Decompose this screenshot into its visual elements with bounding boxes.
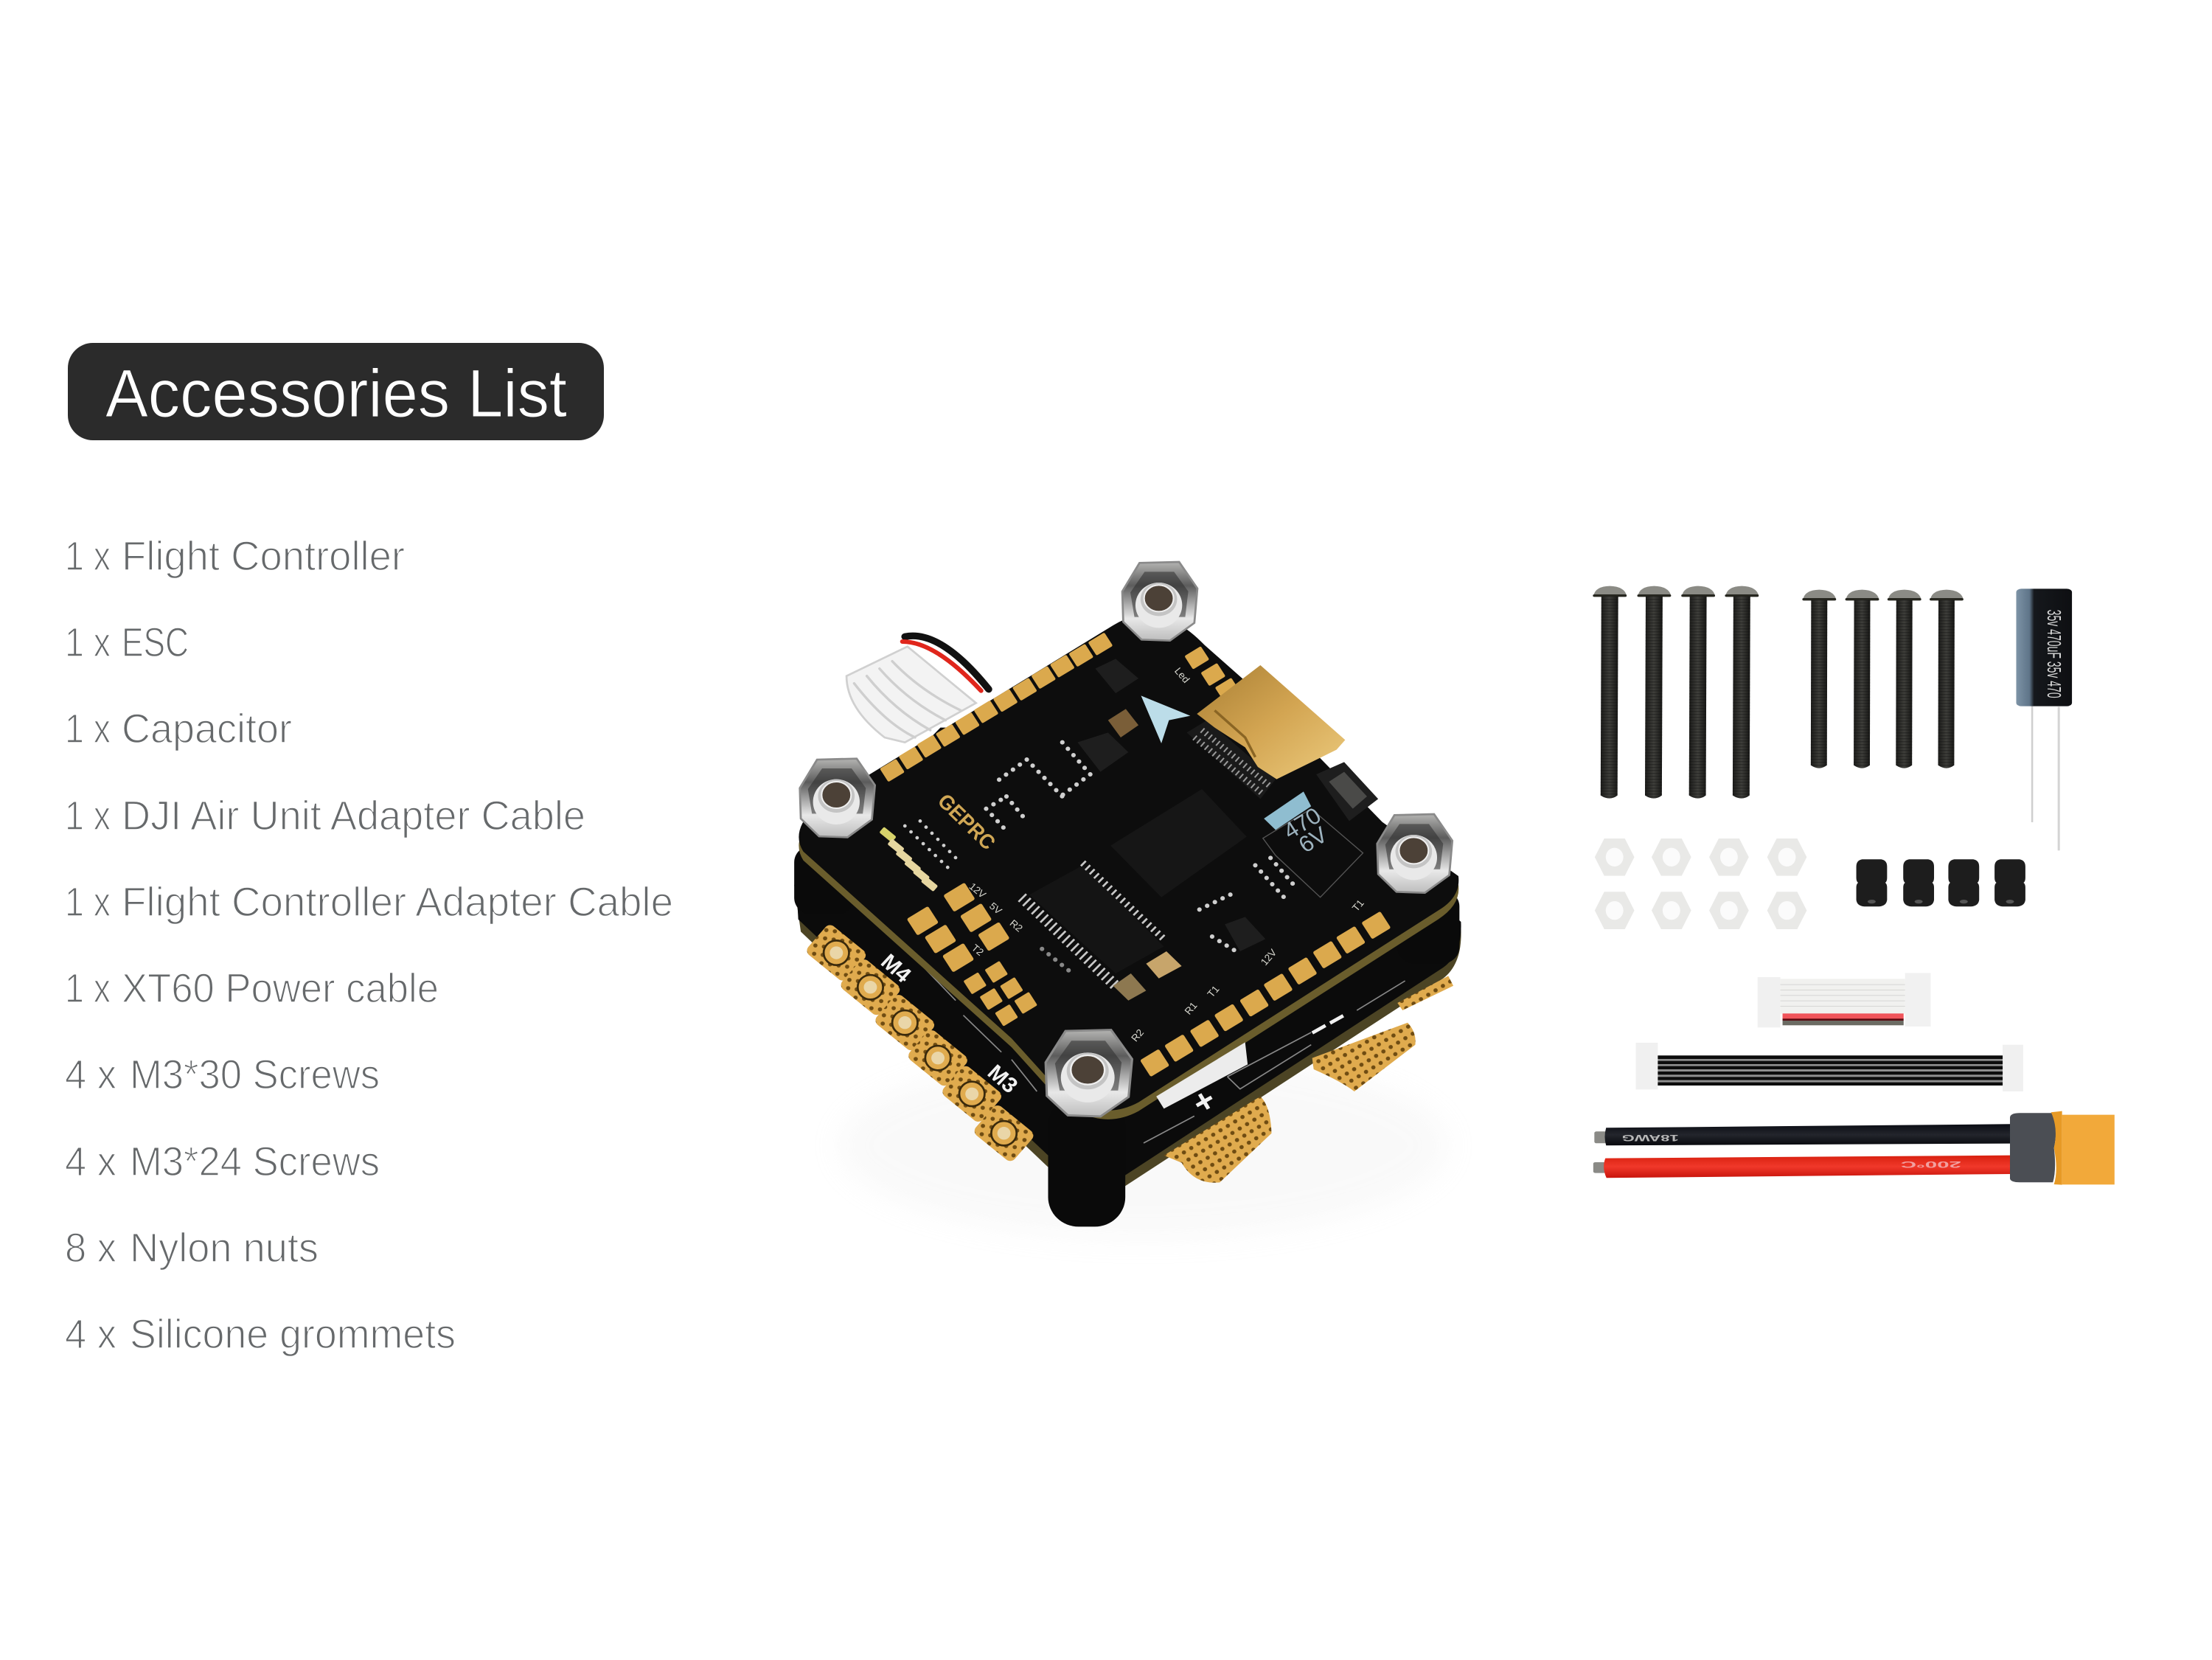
accessories text list: Silicone grommets [130,1310,456,1357]
cables [1593,973,2115,1185]
capacitor 470 6V: 6V [1294,822,1332,858]
left pad cluster [907,883,1037,1027]
ESC silkscreen labels: + [1186,1080,1222,1122]
second chip [1022,863,1164,986]
accessories text list: Capacitor [122,705,292,751]
pin labels [967,665,1366,1043]
pin labels: 12V [1259,947,1279,968]
ESC lower board [794,737,1461,1190]
pin labels: R2 [1129,1027,1146,1043]
accessories text list: 4 x [65,1051,116,1097]
small ICs [1077,659,1378,951]
accessories text list: 1 x [65,878,111,925]
gold SMD parts [1108,709,1182,1001]
screws, capacitor, nuts and grommets [1593,586,2072,929]
electrolytic capacitor: 35v 470uF 35v 470 [2042,610,2064,698]
accessories text list: 1 x [65,792,111,838]
soft shadow [839,1052,1448,1239]
pin labels: T1 [1350,897,1366,914]
ESC silkscreen labels: M4 [876,950,916,987]
accessories text list: Flight Controller Adapter Cable [122,878,673,925]
FC adapter cable [1758,973,1931,1027]
XT60 power cable: 18AWG [1622,1133,1679,1143]
white connector under board [1156,1042,1248,1108]
accessories text list: XT60 Power cable [122,965,439,1011]
top edge pads [880,633,1240,782]
DJI adapter cable [1636,1043,2023,1091]
clear nylon nuts on stack [800,562,1453,1116]
power pads [1164,976,1453,1183]
pin labels: T1 [1206,984,1222,999]
pin labels: R1 [1183,1000,1200,1017]
accessories text list: 4 x [65,1310,116,1357]
XT60 power cable [1593,1111,2115,1185]
XT60 power cable: 200°C [1901,1159,1961,1170]
heading: Accessories List: Accessories List [105,356,567,431]
USB-C connector [1186,665,1345,799]
electrolytic capacitor [2016,588,2072,850]
accessories text list: 8 x [65,1224,116,1271]
wire bundle [846,636,989,743]
accessories text list: Flight Controller [122,532,405,579]
accessories text list: 1 x [65,705,111,751]
ESC outlines [874,920,1405,1143]
accessories text list: DJI Air Unit Adapter Cable [122,792,585,838]
ESC silkscreen labels [876,950,1344,1122]
FC board top [799,615,1458,1111]
LED pads [879,827,938,892]
M3x30 screws [1593,586,1759,799]
pin labels: R2 [1007,917,1025,934]
accessories text list: ESC [122,619,189,665]
FC board edge [799,623,1458,1119]
pin labels: Led [1172,665,1192,685]
capacitor 470 6V: 470 [1279,802,1326,844]
accessories text list: 1 x [65,619,111,665]
pin labels: 5V [987,900,1004,917]
component dots [905,743,1296,973]
arrow logo [1141,695,1190,743]
flight controller and ESC stack [794,562,1461,1239]
main MCU chip [1110,789,1247,897]
accessories text list: M3*24 Screws [130,1138,380,1184]
standoffs [794,846,1459,1226]
accessories text list: 1 x [65,965,111,1011]
GEPRC logo: GEPRC [933,790,1000,855]
accessories text list [65,532,673,1357]
bottom edge pads [1140,911,1391,1077]
accessories text list: M3*30 Screws [130,1051,380,1097]
accessories text list: Nylon nuts [130,1224,319,1271]
pin labels: 12V [967,881,988,900]
pin labels: T2 [970,942,986,958]
silicone grommets [1857,859,2025,906]
motor pads [804,923,1036,1164]
nylon nuts [1595,838,1806,929]
accessories text list: 1 x [65,532,111,579]
ESC silkscreen labels: M3 [983,1060,1022,1098]
M3x24 screws [1802,590,1964,768]
accessories text list: 4 x [65,1138,116,1184]
capacitor 470 6V [1263,791,1363,897]
